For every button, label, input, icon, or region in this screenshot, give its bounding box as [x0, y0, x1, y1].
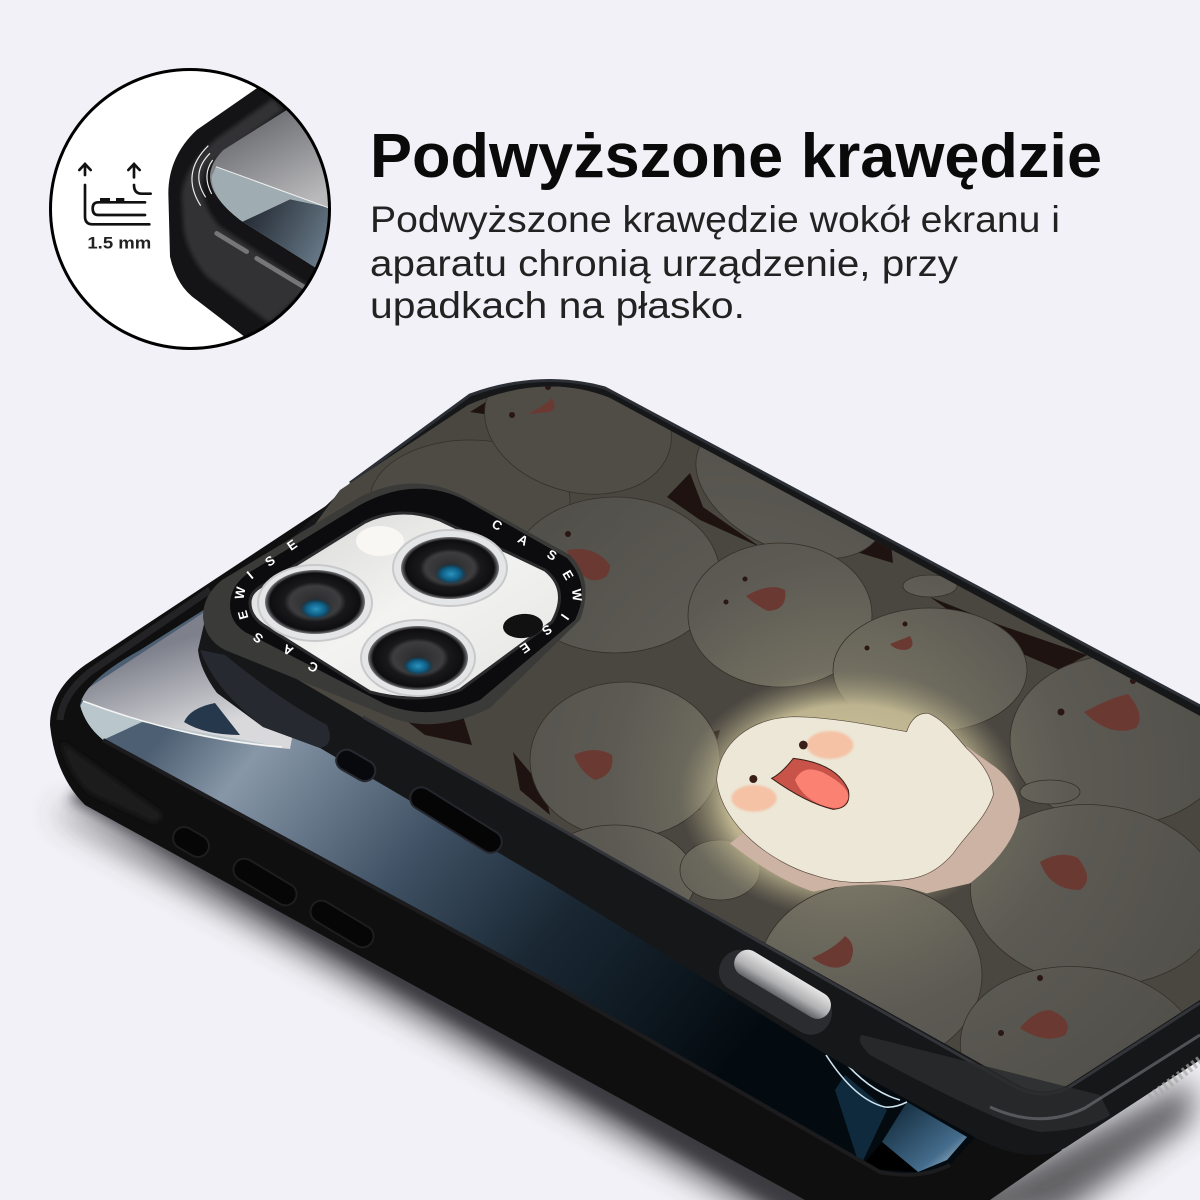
CASEWISE ring lettering: E [517, 639, 533, 657]
face 2 [567, 549, 610, 580]
character eyes [799, 741, 808, 749]
description text: aparatu chronią urządzenie, przy [370, 243, 959, 284]
bump ring [230, 489, 582, 712]
character pink underside [730, 747, 1020, 893]
face top [528, 398, 555, 414]
art: foreground blobs [765, 780, 1200, 1086]
CASEWISE ring lettering: C [489, 516, 505, 534]
artwork [297, 386, 1200, 1091]
front phone mute switch [332, 746, 379, 785]
CASEWISE ring lettering: E [284, 536, 300, 554]
inset: dark screen [243, 199, 330, 268]
drop shadows under phones [52, 780, 1192, 1200]
back screen curved line [83, 701, 282, 747]
front phone side button [406, 783, 506, 857]
back phone [50, 490, 1062, 1200]
face 9 [1020, 1010, 1068, 1039]
back phone upper rim detail [103, 740, 950, 1175]
flash [356, 526, 404, 556]
CASEWISE ring lettering: W [232, 585, 249, 600]
inset: 1.5 mm label: 1.5 mm [87, 233, 151, 252]
inset: light glass stripe [212, 167, 328, 222]
front phone [198, 336, 1200, 1155]
front phone bottom speaker [1150, 1060, 1200, 1098]
back screen left blue streak [835, 1075, 887, 1167]
CASEWISE ring lettering: I [244, 568, 256, 582]
description text [370, 199, 1060, 326]
CASEWISE ring lettering: S [250, 629, 266, 647]
character body [717, 713, 993, 883]
CASEWISE ring lettering: I [558, 611, 572, 623]
character mouth [772, 758, 849, 809]
lens 1 [258, 565, 372, 641]
inset: translucent bumper [182, 98, 310, 323]
microphone hole [502, 612, 544, 640]
inset: white glass line [216, 167, 328, 208]
back phone frame [50, 490, 1062, 1200]
front phone frame [198, 380, 1200, 1155]
front phone rim highlight [350, 380, 1200, 706]
face 4 [890, 636, 913, 650]
CASEWISE ring lettering: C [305, 658, 321, 676]
back phone button 2 [229, 855, 301, 909]
inset: case corner [168, 88, 315, 336]
front phone charging port [711, 940, 841, 1042]
art: glowing character [717, 713, 1020, 893]
back phone frame highlight [60, 590, 210, 720]
CASEWISE ring lettering: E [559, 567, 577, 583]
bump soft shadow patch [200, 650, 330, 748]
lens 2 [393, 530, 507, 606]
back screen black wedge [860, 1142, 918, 1172]
back screen white arcs [826, 1050, 907, 1107]
CASEWISE ring lettering: W [569, 588, 585, 602]
art: glow [678, 670, 1022, 920]
face 8 [812, 936, 853, 968]
lens 3 [361, 620, 475, 696]
art: background blobs [370, 336, 1200, 935]
CASEWISE ring lettering: A [280, 641, 296, 659]
inset: height diagram icon [79, 164, 151, 224]
face 6 [574, 750, 612, 780]
back phone button 3 [306, 897, 378, 951]
character blush [731, 731, 853, 812]
back phone button 1 [169, 823, 213, 861]
face 7 [1040, 855, 1087, 890]
bump base [203, 484, 586, 724]
CASEWISE ring lettering: E [235, 609, 251, 621]
face 3 [746, 587, 785, 611]
inset: edge arcs [192, 146, 213, 206]
front phone lower bumper highlight [363, 717, 1200, 1094]
art: eyes [509, 384, 1136, 1036]
CASEWISE ring lettering: S [262, 552, 278, 570]
inset: bumper highlight [217, 233, 303, 287]
back screen dark shape [184, 703, 240, 735]
face 5 [1084, 694, 1140, 731]
art: small faces [528, 398, 1140, 1039]
back phone bumper patch [62, 742, 161, 822]
art: dark gaps [403, 395, 1087, 820]
back screen light stripe [80, 701, 272, 746]
CASEWISE ring lettering [232, 516, 585, 676]
inset: screen top [210, 110, 328, 268]
camera bump [200, 484, 586, 748]
CASEWISE ring lettering: S [539, 621, 555, 639]
front phone corner gloss patch [860, 1035, 1110, 1132]
description text: upadkach na płasko. [370, 285, 745, 326]
front phone corner gloss line [990, 1035, 1200, 1119]
back screen gray area [82, 613, 292, 749]
back phone screen [80, 610, 975, 1172]
CASEWISE ring lettering: A [515, 531, 531, 549]
title: Podwyższone krawędzie [370, 122, 1102, 191]
CASEWISE ring lettering: S [544, 546, 560, 564]
back screen blue streaks [882, 1102, 967, 1172]
lens plate [250, 513, 560, 698]
description text: Podwyższone krawędzie wokół ekranu i [370, 199, 1060, 240]
circular detail inset [50, 60, 340, 348]
